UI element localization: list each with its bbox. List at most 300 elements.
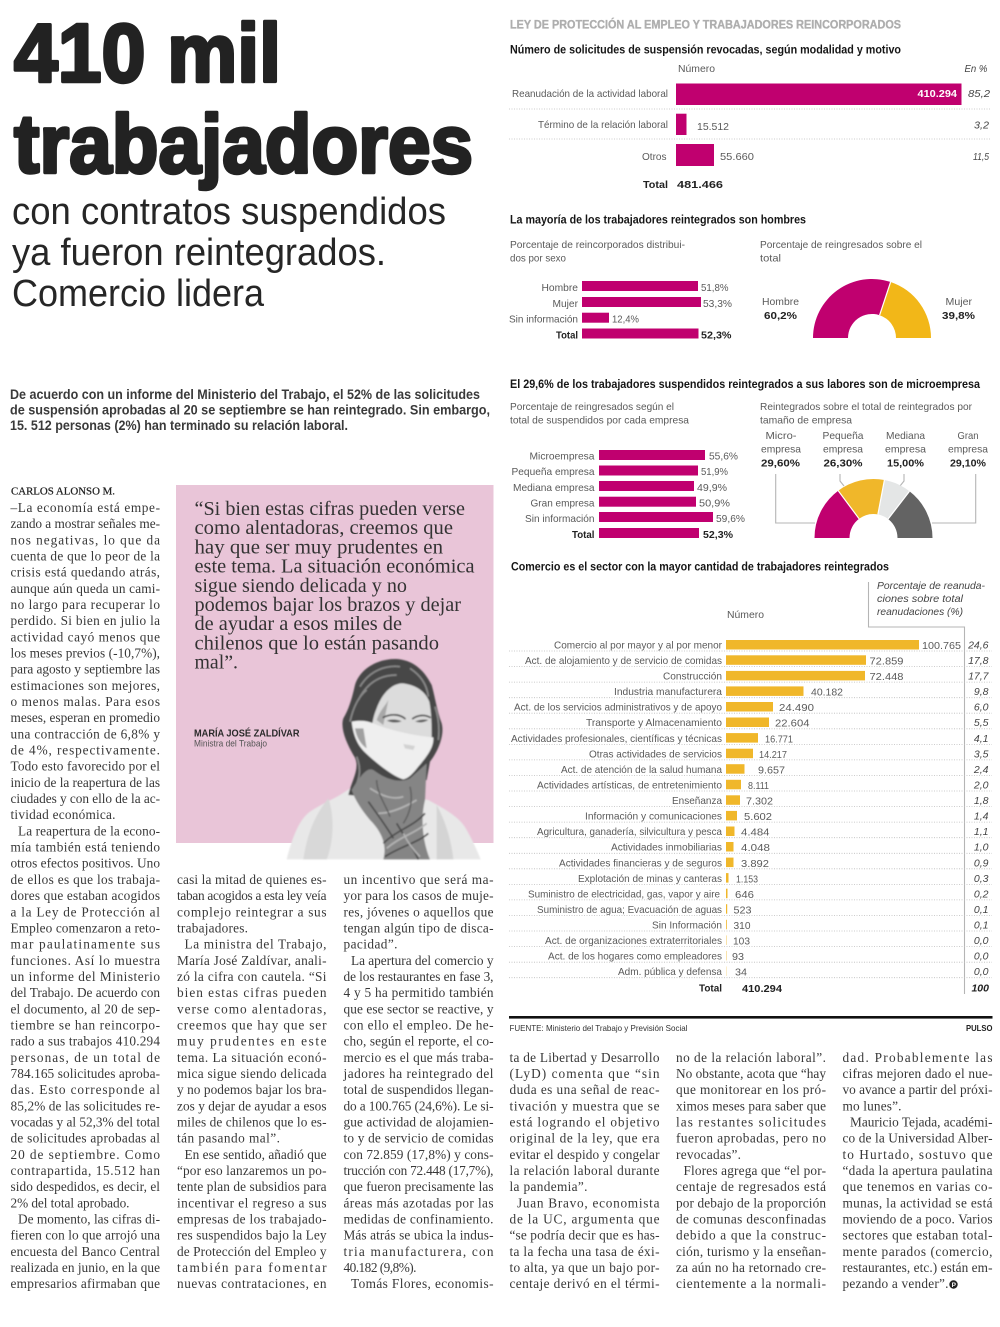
bar chart: empresa: Pequeña empresa: [512, 466, 595, 478]
subtitle: Comercio lidera: [12, 273, 265, 315]
article column 4: ta de Libertad y Desarrollo: [510, 1050, 660, 1065]
section kicker: LEY DE PROTECCIÓN AL EMPLEO Y TRABAJADORES REINCORPORADOS: [510, 16, 901, 32]
panel: tamaño de empresa: [510, 377, 988, 541]
sector percentages: 17,7: [968, 671, 990, 683]
bar chart: empresa: Microempresa: [530, 450, 595, 462]
donut label: hombre: Hombre: [762, 296, 799, 308]
bar chart: sexo: Sin información: [509, 314, 578, 326]
article column 3: medidas de confinamiento.: [344, 1212, 494, 1226]
article column 1: cuenta de que lo peor de la: [10, 548, 160, 564]
bar chart description: [510, 401, 689, 426]
label: gran empresa: [948, 430, 988, 470]
sector labels: Transporte y Almacenamiento: [586, 717, 722, 729]
article column 1: empresarios afirmaban que: [10, 1276, 160, 1291]
article column 6: que tenemos en varias co-: [842, 1179, 992, 1194]
article column 1: 784.165 solicitudes aproba-: [10, 1066, 160, 1081]
sector labels: Agricultura, ganadería, silvicultura y pesca: [537, 826, 722, 838]
article column 4: tivación y muestra que se: [510, 1098, 660, 1113]
column headers: Número: [678, 63, 715, 75]
panel: reintegrados por sexo: [509, 212, 976, 342]
sector labels: Suministro de agua; Evacuación de aguas: [537, 904, 722, 916]
article column 2: nuevas contrataciones, en: [177, 1276, 327, 1291]
article column 1: zando a mostrar señales me-: [10, 516, 160, 531]
article column 3: Tomás Flores, economis-: [351, 1276, 494, 1291]
bar chart: empresa: 52,3%: [703, 529, 734, 541]
row: otros: [642, 144, 989, 166]
article column 1: crisis está quedando atrás,: [10, 565, 160, 580]
sector values: 523: [734, 904, 752, 916]
sector labels: Enseñanza: [672, 795, 722, 807]
quote text: chilenos que lo están pasando: [194, 632, 439, 654]
article column 6: Mauricio Tejada, académi-: [850, 1114, 992, 1130]
bar chart: empresa: Total: [572, 529, 595, 541]
sector values: 34: [735, 967, 747, 979]
sector percentages: [967, 640, 990, 994]
label: microempresa: empresa: [761, 444, 801, 456]
article column 2: tente plan de subsidios para: [177, 1179, 327, 1194]
sector values: 16.771: [765, 733, 793, 745]
article column 5: Flores agrega que “el por-: [684, 1163, 826, 1178]
article column 2: [177, 872, 327, 1291]
article column 3: gue actividad de alojamien-: [344, 1114, 494, 1130]
article column 2: zos y dejar de ayudar a esos: [177, 1098, 326, 1113]
row: término: [538, 114, 989, 135]
article column 1: nos negativas, lo que da: [10, 532, 160, 547]
article column 5: revocadas”.: [676, 1147, 741, 1162]
article column 3: La apertura del comercio y: [351, 953, 494, 968]
article column 4: (LyD) comenta que “sin: [510, 1066, 660, 1081]
row: término: 3,2: [974, 120, 989, 132]
icon: end mark P: [949, 1280, 958, 1289]
article column 6: restaurantes, etc.) están em-: [842, 1260, 992, 1275]
article column 1: o menos malas. Para esos: [10, 694, 160, 709]
bar chart: empresa: 55,6%: [709, 450, 738, 462]
article column 4: to alta, ya que un bajo por-: [510, 1260, 660, 1275]
article column 1: mar paulatinamente sus: [10, 937, 160, 952]
quote text: mal”.: [194, 652, 238, 674]
bar chart description: dos por sexo: [510, 252, 566, 264]
article column 1: 85,2% de las solicitudes re-: [10, 1098, 160, 1113]
sector percentages: 24,6: [967, 640, 989, 652]
subtitle: [12, 191, 446, 315]
article column 3: tria manufacturera, con: [344, 1244, 494, 1259]
sector labels: Act. de alojamiento y de servicio de comidas: [525, 655, 722, 667]
article column 3: do a 100.765 (24,6%). Le si-: [344, 1098, 494, 1113]
article column 1: contrapartida, 15.512 han: [10, 1163, 160, 1178]
article column 1: das. Esto corresponde al: [10, 1082, 160, 1097]
article column 2: miles de chilenos que lo es-: [177, 1114, 326, 1130]
quote text: podemos bajar los brazos y dejar: [194, 594, 461, 616]
bar chart: empresa: 59,6%: [716, 513, 745, 525]
sector values: 14.217: [759, 749, 787, 761]
sector percentages: 1,8: [974, 795, 989, 807]
label: pequeña empresa: empresa: [823, 444, 863, 456]
quote text: [194, 498, 474, 674]
sector values: 103: [733, 936, 750, 948]
quote text: como alentadoras, creemos que: [194, 517, 453, 539]
pull quote panel: [176, 485, 494, 859]
article column 3: que fueron precisamente las: [344, 1179, 494, 1194]
article column 6: mente parados (comercio,: [842, 1244, 992, 1259]
sector percentages: 0,1: [974, 904, 988, 916]
subtitle: con contratos suspendidos: [12, 191, 446, 233]
article column 6: mo lunes”.: [842, 1098, 902, 1113]
article column 2: casi la mitad de quienes es-: [177, 872, 326, 887]
article column 2: tema. La situación econó-: [177, 1050, 326, 1065]
article column 3: 40.182 (9,8%).: [344, 1260, 416, 1275]
article column 4: de la UC, argumenta que: [510, 1212, 660, 1226]
article column 1: 20 de septiembre. Como: [10, 1147, 160, 1162]
article column 3: un incentivo que será ma-: [344, 872, 494, 887]
donut label: hombre: [762, 296, 799, 322]
article column 3: 4 y 5 ha permitido también: [344, 985, 494, 1000]
article column 3: yor para los casos de muje-: [344, 888, 494, 903]
article column 6: to Hurtado, sostuvo que: [842, 1147, 993, 1162]
sector values: 24.490: [779, 702, 814, 714]
article column 1: actividad cayó menos que: [10, 629, 160, 644]
article column 2: La ministra del Trabajo,: [184, 937, 326, 952]
sector values: 8.111: [748, 780, 769, 792]
sector values: 4.048: [741, 842, 770, 854]
label: gran empresa: empresa: [948, 444, 988, 456]
article column 1: de ellos es que los trabaja-: [10, 872, 160, 887]
article column 2: creemos que hay que ser: [177, 1017, 327, 1032]
label: mediana empresa: Mediana: [886, 430, 925, 442]
article column 3: áreas más azotadas por las: [344, 1195, 494, 1210]
article column 5: de comunas desconfinadas: [676, 1212, 826, 1226]
quote text: este tema. La situación económica: [194, 556, 474, 578]
article column 2: incentivar el regreso a sus: [177, 1195, 326, 1210]
bar chart: sexo: 52,3%: [701, 330, 732, 342]
source line: PULSO: [966, 1023, 993, 1033]
donut description: Reintegrados sobre el total de reintegrados por: [760, 401, 972, 413]
sector labels: Actividades inmobiliarias: [611, 842, 722, 854]
chart heading: Comercio es el sector con la mayor cantidad de trabajadores reintegrados: [511, 560, 889, 574]
article column 5: ción, turismo y la enseñan-: [676, 1244, 826, 1259]
article column 1: aunque aún queda un cami-: [10, 581, 160, 596]
article column 1: sido despedidos, es decir, el: [10, 1179, 160, 1194]
sector percentages: 100: [971, 982, 989, 994]
article column 1: realizada en junio, en la que: [10, 1260, 160, 1275]
article column 1: no largo para recuperar lo: [10, 597, 160, 612]
column headers: En %: [964, 63, 988, 75]
sector values: 9.657: [758, 764, 785, 776]
donut description: total: [760, 252, 781, 264]
sector values: 646: [735, 889, 754, 901]
article column 5: por debajo de la proporción: [676, 1195, 826, 1210]
article column 6: pezando a vender”.: [842, 1276, 948, 1291]
article column 1: una contracción de 6,8% y: [10, 726, 160, 741]
row: otros: Otros: [642, 151, 666, 163]
article column 4: “se podría decir que es has-: [510, 1228, 660, 1243]
label: mediana empresa: [885, 430, 926, 470]
bar chart: sexo: 53,3%: [703, 298, 732, 310]
article column 3: jadores ha reintegrado del: [342, 1066, 494, 1081]
article column 2: muy prudentes en este: [177, 1034, 327, 1049]
bar chart: empresa: Mediana empresa: [513, 482, 595, 494]
sector percentages: 17,8: [968, 655, 989, 667]
article column 1: –La economía está empe-: [10, 500, 160, 515]
bar chart: sexo: [509, 281, 732, 342]
article column 5: [676, 1050, 826, 1291]
sector bars: [726, 640, 919, 976]
icon: end mark P: P: [952, 1282, 957, 1289]
article column 1: un informe del Ministerio: [10, 969, 160, 984]
article column 2: tán pasando mal”.: [177, 1131, 280, 1146]
sector values: 72.859: [870, 656, 904, 668]
article column 3: trucción con 72.448 (17,7%),: [344, 1163, 494, 1178]
article column 4: original de la ley, que era: [510, 1131, 660, 1146]
label: mediana empresa: 15,00%: [887, 458, 925, 470]
sector labels: Act. de los hogares como empleadores: [548, 951, 722, 963]
article column 2: mica sigue siendo delicada: [177, 1066, 327, 1081]
title: trabajadores: [14, 98, 473, 190]
donut label: hombre: 60,2%: [764, 310, 798, 322]
article column 1: personas, de un total de: [10, 1050, 160, 1065]
article column 1: estimaciones son mejores,: [10, 678, 160, 693]
article column 1: La reapertura de la econo-: [18, 823, 160, 838]
portrait illustration: [287, 659, 481, 859]
article column 4: centaje derivó en el térmi-: [510, 1276, 660, 1291]
bar chart description: Porcentaje de reingresados según el: [510, 401, 674, 413]
article column 2: verse como alentadoras,: [177, 1001, 326, 1016]
article column 1: para agosto y septiembre las: [10, 662, 160, 677]
article column 1: del Trabajo. De acuerdo con: [10, 985, 160, 1000]
label: mediana empresa: empresa: [885, 444, 926, 456]
article column 1: tividad económica.: [10, 807, 116, 822]
bar chart: empresa: [512, 450, 745, 541]
row: reanudación: 410.294: [918, 88, 957, 100]
row: total: 481.466: [677, 179, 723, 191]
article column 3: con ello el empleo. De he-: [344, 1017, 494, 1032]
article column 2: res suspendidos bajo la Ley: [177, 1228, 327, 1243]
bar chart: empresa: Sin información: [525, 513, 595, 525]
article column 4: duda es una señal de reac-: [510, 1082, 660, 1097]
half donut: empresa: [814, 479, 932, 538]
article column 1: perdido. Si bien en julio la: [10, 613, 160, 628]
standfirst: 15. 512 personas (2%) han terminado su relación laboral.: [10, 417, 348, 433]
article column 6: sectores que estaban total-: [842, 1228, 992, 1243]
chart: solicitudes revocadas: [509, 42, 991, 191]
sector percentages: 0,9: [974, 857, 989, 869]
sector percentages: 9,8: [974, 686, 989, 698]
sector labels: Total: [699, 982, 722, 994]
sector labels: Act. de atención de la salud humana: [561, 764, 722, 776]
sector values: 7.302: [746, 796, 773, 808]
bar chart: empresa: 50,9%: [699, 498, 730, 510]
article column 3: cho, según el reporte, el co-: [344, 1034, 494, 1049]
sector labels: Información y comunicaciones: [585, 811, 722, 823]
bar chart: sexo: Total: [556, 330, 578, 342]
article column 2: trabajadores.: [177, 920, 248, 935]
subtitle: ya fueron reintegrados.: [12, 232, 386, 274]
sector percentages: 2,4: [973, 764, 989, 776]
article column 6: vo avance a partir del próxi-: [842, 1082, 992, 1097]
quote text: de ayudar a esos miles de: [194, 613, 402, 635]
article column 5: no de la relación laboral”.: [676, 1050, 826, 1065]
donut description: [760, 239, 922, 264]
source line: FUENTE: Ministerio del Trabajo y Previsión Social: [510, 1023, 688, 1033]
article column 1: de 4%, respectivamente.: [10, 743, 160, 758]
article column 1: mía también está teniendo: [10, 840, 160, 855]
article column 1: los meses previos (-10,7%),: [10, 646, 160, 660]
article column 2: taban acogidos a esta ley veía: [177, 888, 327, 903]
row: otros: 11,5: [973, 151, 989, 163]
sector percentages: 1,1: [974, 826, 988, 838]
article column 5: que monitorear en los pró-: [676, 1082, 826, 1097]
article column 3: [342, 872, 494, 1291]
bar chart: empresa: 51,9%: [701, 466, 728, 478]
sector values: 410.294: [742, 983, 782, 995]
article column 3: pacidad”.: [344, 937, 398, 952]
quote text: hay que ser muy prudentes en: [194, 536, 443, 558]
article column 2: empresas de los trabajado-: [177, 1212, 326, 1226]
article column 4: la relación laboral durante: [510, 1163, 660, 1178]
byline: CARLOS ALONSO M.: [11, 486, 115, 498]
sector percentages: 0,3: [974, 873, 989, 885]
sector percentages: 2,0: [973, 780, 989, 792]
article column 2: En ese sentido, añadió que: [184, 1147, 327, 1162]
quote background: [176, 485, 494, 843]
article column 2: María José Zaldívar, anali-: [177, 953, 326, 968]
article column 6: munas, la actividad se está: [842, 1195, 993, 1210]
sector percentages: 3,5: [974, 748, 989, 760]
article column 5: las restantes solicitudes: [676, 1114, 826, 1130]
donut label: mujer: Mujer: [946, 296, 972, 308]
label connectors: [776, 474, 976, 523]
sector values: 5.602: [744, 811, 772, 823]
donut label: mujer: [942, 296, 976, 322]
sector labels: [511, 640, 722, 994]
panel heading: La mayoría de los trabajadores reintegrados son hombres: [510, 212, 806, 226]
row: reanudación: 85,2: [968, 88, 990, 100]
sector percentages: 0,0: [974, 966, 989, 978]
bar chart: empresa: 49,9%: [697, 482, 727, 494]
article column 2: y no podemos bajar los bra-: [177, 1082, 326, 1097]
label: microempresa: 29,60%: [761, 458, 801, 470]
article column 3: que ese sector se reactive, y: [344, 1001, 494, 1016]
quote attribution: [194, 726, 300, 748]
percentage column note: [868, 580, 985, 994]
article column 5: za aún no ha retornado cre-: [676, 1260, 826, 1275]
chart: sectores: [509, 560, 992, 995]
sector percentages: 0,1: [974, 920, 988, 932]
sector labels: Industria manufacturera: [614, 686, 722, 698]
article column 6: co de la Universidad Alber-: [842, 1131, 992, 1146]
chart heading: Número de solicitudes de suspensión revocadas, según modalidad y motivo: [510, 42, 901, 56]
article column 1: de solicitudes aprobadas al: [10, 1131, 160, 1146]
article column 3: tengan algún tipo de disca-: [344, 920, 494, 935]
sector labels: Construcción: [663, 671, 722, 683]
article column 5: No obstante, acota que “hay: [676, 1066, 826, 1081]
article column 1: [10, 500, 160, 1291]
row: otros: 55.660: [720, 151, 754, 163]
donut description: tamaño de empresa: [760, 414, 852, 426]
article column 4: Juan Bravo, economista: [517, 1195, 660, 1210]
article column 3: res, jóvenes o aquellos que: [344, 904, 494, 919]
bar chart description: total de suspendidos por cada empresa: [510, 414, 689, 426]
article column 1: otros efectos positivos. Uno: [10, 856, 160, 871]
label: gran empresa: 29,10%: [950, 458, 987, 470]
source line: [510, 1023, 993, 1033]
bar chart description: Porcentaje de reincorporados distribui-: [510, 239, 685, 251]
sector values: [732, 640, 961, 995]
quote text: sigue siendo delicada y no: [194, 575, 407, 597]
quote attribution: Ministra del Trabajo: [194, 738, 267, 748]
bar chart: sexo: 51,8%: [701, 282, 728, 294]
article column 2: bien estas cifras pueden: [177, 985, 327, 1000]
row: reanudación: Reanudación de la actividad laboral: [512, 88, 668, 100]
sector labels: Act. de organizaciones extraterritoriales: [545, 935, 722, 947]
bar chart description: [510, 239, 685, 264]
sector labels: Comercio al por mayor y al por menor: [554, 640, 722, 652]
title: 410 mil: [14, 6, 281, 100]
article column 1: tiembre se han reincorpo-: [10, 1017, 160, 1032]
article column 6: [842, 1050, 993, 1291]
sector percentages: 1,0: [974, 842, 989, 854]
standfirst: de suspensión aprobadas al 20 se septiembre se han reintegrado. Sin embargo,: [10, 402, 490, 418]
article column 1: encuesta del Banco Central: [10, 1244, 160, 1259]
row: reanudación: [512, 84, 990, 105]
sector values: 310: [734, 920, 751, 932]
bar chart: sexo: Mujer: [552, 298, 578, 310]
quote text: “Si bien estas cifras pueden verse: [194, 498, 465, 520]
sector labels: Explotación de minas y canteras: [578, 873, 722, 885]
quote attribution: MARÍA JOSÉ ZALDÍVAR: [194, 726, 300, 740]
sector labels: Act. de los servicios administrativos y de apoyo: [514, 702, 722, 714]
article column 1: meses, esperan en promedio: [10, 710, 160, 725]
article column 3: to y de servicio de comidas: [344, 1131, 494, 1146]
article column 6: cifras mejoren dado el nue-: [842, 1066, 992, 1081]
label: gran empresa: Gran: [958, 430, 979, 442]
row: total: [643, 179, 723, 191]
sector percentages: 0,2: [974, 888, 989, 900]
label: microempresa: Micro-: [766, 430, 797, 442]
sector percentages: 0,0: [974, 935, 989, 947]
sector values: 72.448: [870, 671, 904, 683]
article column 1: rado a sus trabajos 410.294: [10, 1034, 160, 1049]
label: microempresa: [761, 430, 801, 470]
donut description: [760, 401, 972, 426]
row: término: 15.512: [697, 121, 729, 133]
bar chart: sexo: Hombre: [542, 282, 578, 294]
sector percentages: 1,4: [974, 811, 989, 823]
sector percentages: 6,0: [974, 702, 989, 714]
article column 3: total de suspendidos llegan-: [344, 1082, 494, 1097]
article column 2: de Protección del Empleo y: [177, 1244, 327, 1259]
sector percentages: 4,1: [974, 733, 988, 745]
article column 2: también para fomentar: [177, 1260, 327, 1275]
article column 1: fieren con lo que arrojó una: [10, 1228, 160, 1243]
bar chart: empresa: Gran empresa: [530, 498, 595, 510]
percentage column note: reanudaciones (%): [877, 606, 963, 618]
sector labels: Adm. pública y defensa: [618, 966, 722, 978]
sector values: 22.604: [775, 718, 810, 730]
sector percentages: 0,0: [974, 951, 989, 963]
article column 1: De momento, las cifras di-: [18, 1212, 160, 1226]
bar chart: sexo: 12,4%: [612, 314, 639, 326]
article column 6: moviendo de a poco. Varios: [842, 1212, 992, 1226]
percentage column note: ciones sobre total: [877, 593, 964, 605]
row: término: Término de la relación laboral: [538, 119, 668, 131]
article column 1: inicio de la reapertura de las: [10, 775, 160, 790]
sector values: 93: [732, 951, 744, 963]
article column 5: fueron aprobadas, pero no: [676, 1131, 826, 1146]
sector labels: Suministro de electricidad, gas, vapor y aire: [528, 888, 720, 900]
article column 5: ximos meses para saber que: [676, 1098, 826, 1113]
row: total: Total: [643, 179, 668, 191]
article column 1: el documento, al 20 de sep-: [10, 1001, 160, 1016]
